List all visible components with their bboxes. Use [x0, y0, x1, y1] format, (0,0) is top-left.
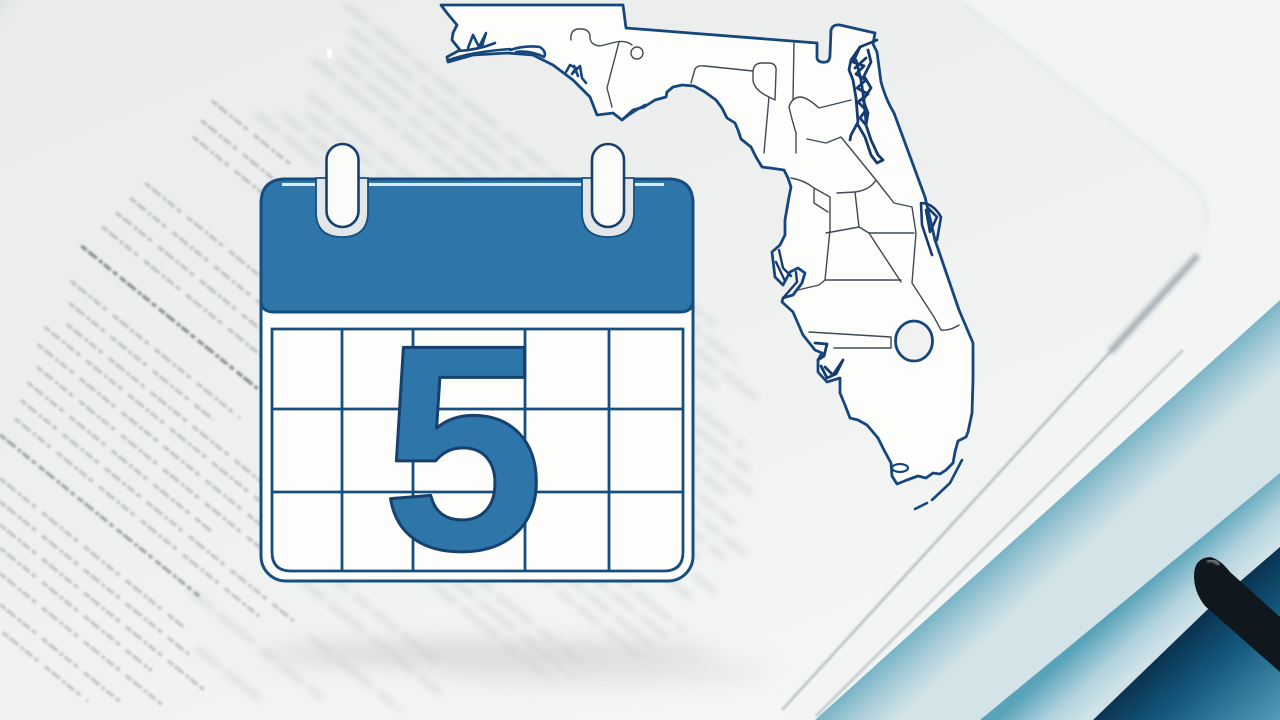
map: panhandle bay details — [449, 33, 645, 120]
map: state outline — [441, 5, 973, 484]
background: blurred document text — [0, 4, 757, 711]
calendar icon — [261, 144, 693, 612]
calendar: left binding ring — [316, 144, 368, 237]
background: soft shadow below calendar — [260, 641, 770, 684]
folder: lower teal band — [980, 473, 1280, 720]
map: county boundaries — [571, 29, 959, 348]
background: teal folder and pen — [815, 300, 1280, 720]
calendar: page body — [261, 179, 693, 581]
calendar: numeral 5: 5 — [382, 285, 544, 612]
map: Charlotte Harbor detail — [815, 343, 843, 378]
map: Florida Keys — [915, 460, 962, 509]
calendar: date grid — [272, 329, 683, 571]
map of Florida — [441, 5, 973, 509]
map: Lake Okeechobee — [896, 321, 932, 361]
folder: upper teal band — [815, 300, 1280, 720]
pen — [1194, 557, 1280, 672]
folder: dark gap — [1093, 547, 1280, 720]
calendar: blue header — [261, 179, 693, 312]
map: northeast coastal lagoons — [849, 40, 883, 163]
calendar: header top highlight — [282, 183, 664, 186]
map: east coast lagoon — [921, 203, 941, 255]
calendar: right binding ring — [582, 144, 634, 237]
map: Florida Bay island — [892, 464, 908, 472]
map: Tampa Bay detail — [776, 250, 797, 298]
